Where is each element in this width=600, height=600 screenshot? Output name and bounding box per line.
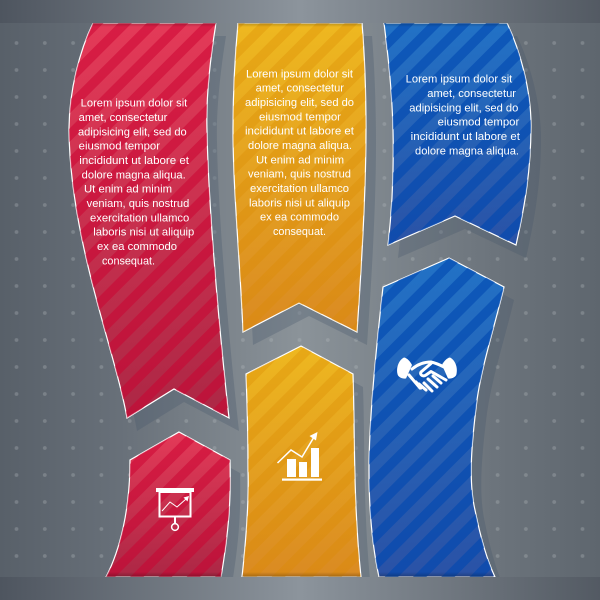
yellow ribbon text: laboris nisi ut aliquip — [249, 197, 350, 209]
yellow ribbon text: veniam, quis nostrud — [248, 169, 351, 181]
red ribbon text: laboris nisi ut aliquip — [93, 227, 194, 239]
blue ribbon text: incididunt ut labore et — [411, 131, 520, 143]
yellow ribbon text: adipisicing elit, sed do — [245, 97, 354, 109]
panel: blue text ribbon — [384, 23, 531, 245]
icon: handshake — [397, 358, 457, 391]
icon: presentation board — [156, 488, 194, 530]
top band — [0, 0, 600, 27]
red ribbon shape — [69, 23, 229, 418]
red ribbon text: dolore magna aliqua. — [82, 169, 186, 181]
red ribbon text — [78, 98, 194, 267]
red ribbon text: eiusmod tempor — [79, 141, 160, 153]
yellow ribbon text: incididunt ut labore et — [245, 126, 354, 138]
panel: blue icon tab — [369, 258, 504, 577]
red tab shape — [106, 432, 230, 577]
panel: yellow text ribbon — [233, 23, 366, 332]
panel: yellow icon tab — [242, 346, 361, 577]
yellow ribbon text: dolore magna aliqua. — [248, 140, 352, 152]
red ribbon text: ex ea commodo — [97, 241, 177, 253]
red ribbon text: amet, consectetur — [79, 112, 168, 124]
yellow tab shape — [242, 346, 361, 577]
yellow ribbon text — [245, 68, 354, 238]
red ribbon text: Ut enim ad minim — [84, 184, 172, 196]
yellow ribbon shape — [233, 23, 366, 332]
red ribbon text: incididunt ut labore et — [79, 155, 189, 167]
ribbon shadows — [134, 36, 541, 577]
blue ribbon text: eiusmod tempor — [438, 117, 520, 129]
blue ribbon text: Lorem ipsum dolor sit — [406, 74, 512, 86]
red ribbon text: exercitation ullamco — [90, 212, 189, 224]
icon: rising bar chart — [278, 432, 322, 481]
blue ribbon text: dolore magna aliqua. — [415, 145, 519, 157]
blue ribbon text: amet, consectetur — [427, 88, 516, 100]
red ribbon text: consequat. — [102, 255, 155, 267]
red ribbon text: adipisicing elit, sed do — [78, 126, 187, 138]
red ribbon text: veniam, quis nostrud — [87, 198, 189, 210]
blue ribbon shape — [384, 23, 531, 245]
bottom band — [0, 572, 600, 600]
blue tab shape — [369, 258, 504, 577]
yellow ribbon text: Ut enim ad minim — [256, 154, 344, 166]
yellow ribbon text: consequat. — [273, 226, 326, 238]
yellow ribbon text: Lorem ipsum dolor sit — [246, 68, 353, 80]
blue ribbon text — [406, 74, 520, 157]
yellow ribbon text: exercitation ullamco — [250, 183, 349, 195]
yellow ribbon text: eiusmod tempor — [259, 111, 341, 123]
panel: red icon tab — [106, 432, 230, 577]
yellow ribbon text: ex ea commodo — [260, 212, 339, 224]
blue ribbon text: adipisicing elit, sed do — [409, 102, 518, 114]
yellow ribbon text: amet, consectetur — [256, 83, 344, 95]
panel: red text ribbon — [69, 23, 229, 418]
red ribbon text: Lorem ipsum dolor sit — [81, 98, 187, 110]
